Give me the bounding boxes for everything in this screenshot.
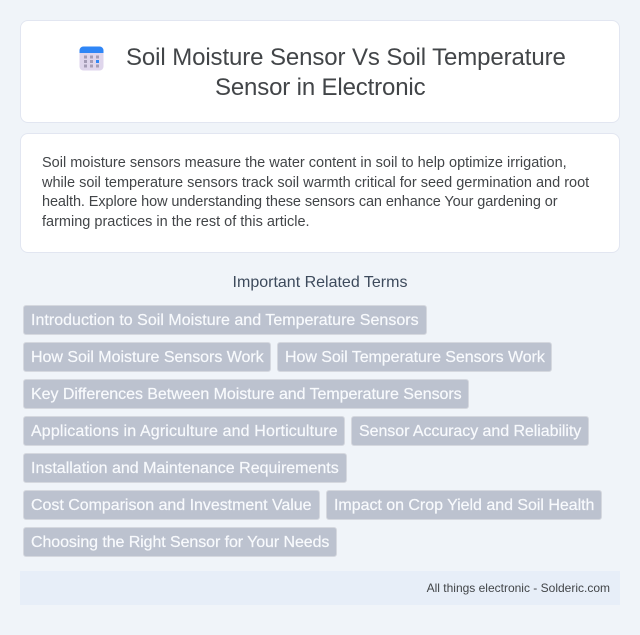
footer text: All things electronic - Solderic.com: [427, 581, 610, 595]
tag: [23, 305, 427, 335]
tag: How Soil Moisture Sensors Work: [31, 349, 264, 366]
intro paragraph: health. Explore how understanding these sensors can enhance Your gardening or: [42, 194, 557, 210]
tag: [23, 490, 320, 520]
tag: [23, 379, 469, 409]
intro paragraph: farming practices in the rest of this article.: [42, 214, 310, 230]
footer bar: [20, 571, 620, 605]
intro paragraph: while soil temperature sensors track soil warmth critical for seed germination and root: [42, 175, 589, 191]
title: [126, 44, 566, 101]
tag: Choosing the Right Sensor for Your Needs: [31, 534, 329, 551]
icon: calendar: [80, 46, 104, 70]
tag: [351, 416, 589, 446]
intro paragraph: Soil moisture sensors measure the water content in soil to help optimize irrigation,: [42, 155, 567, 171]
tag: Key Differences Between Moisture and Temperature Sensors: [31, 386, 462, 403]
related terms heading: Important Related Terms: [233, 274, 407, 291]
tag: [23, 342, 271, 372]
tag: [23, 453, 347, 483]
tag: Installation and Maintenance Requirements: [31, 460, 339, 477]
tag: Cost Comparison and Investment Value: [31, 497, 312, 514]
tag: [23, 527, 337, 557]
tag: [23, 416, 345, 446]
tag: [326, 490, 602, 520]
title: Sensor in Electronic: [215, 74, 425, 101]
tag: Introduction to Soil Moisture and Temperature Sensors: [31, 312, 419, 329]
title: Soil Moisture Sensor Vs Soil Temperature: [126, 44, 566, 71]
intro paragraph: [42, 155, 590, 230]
tag: How Soil Temperature Sensors Work: [285, 349, 545, 366]
intro text panel: [20, 133, 620, 253]
tag: Impact on Crop Yield and Soil Health: [334, 497, 594, 514]
tag: [277, 342, 552, 372]
tag: Applications in Agriculture and Horticulture: [31, 423, 338, 440]
header panel: [20, 20, 620, 123]
tag: Sensor Accuracy and Reliability: [359, 423, 581, 440]
